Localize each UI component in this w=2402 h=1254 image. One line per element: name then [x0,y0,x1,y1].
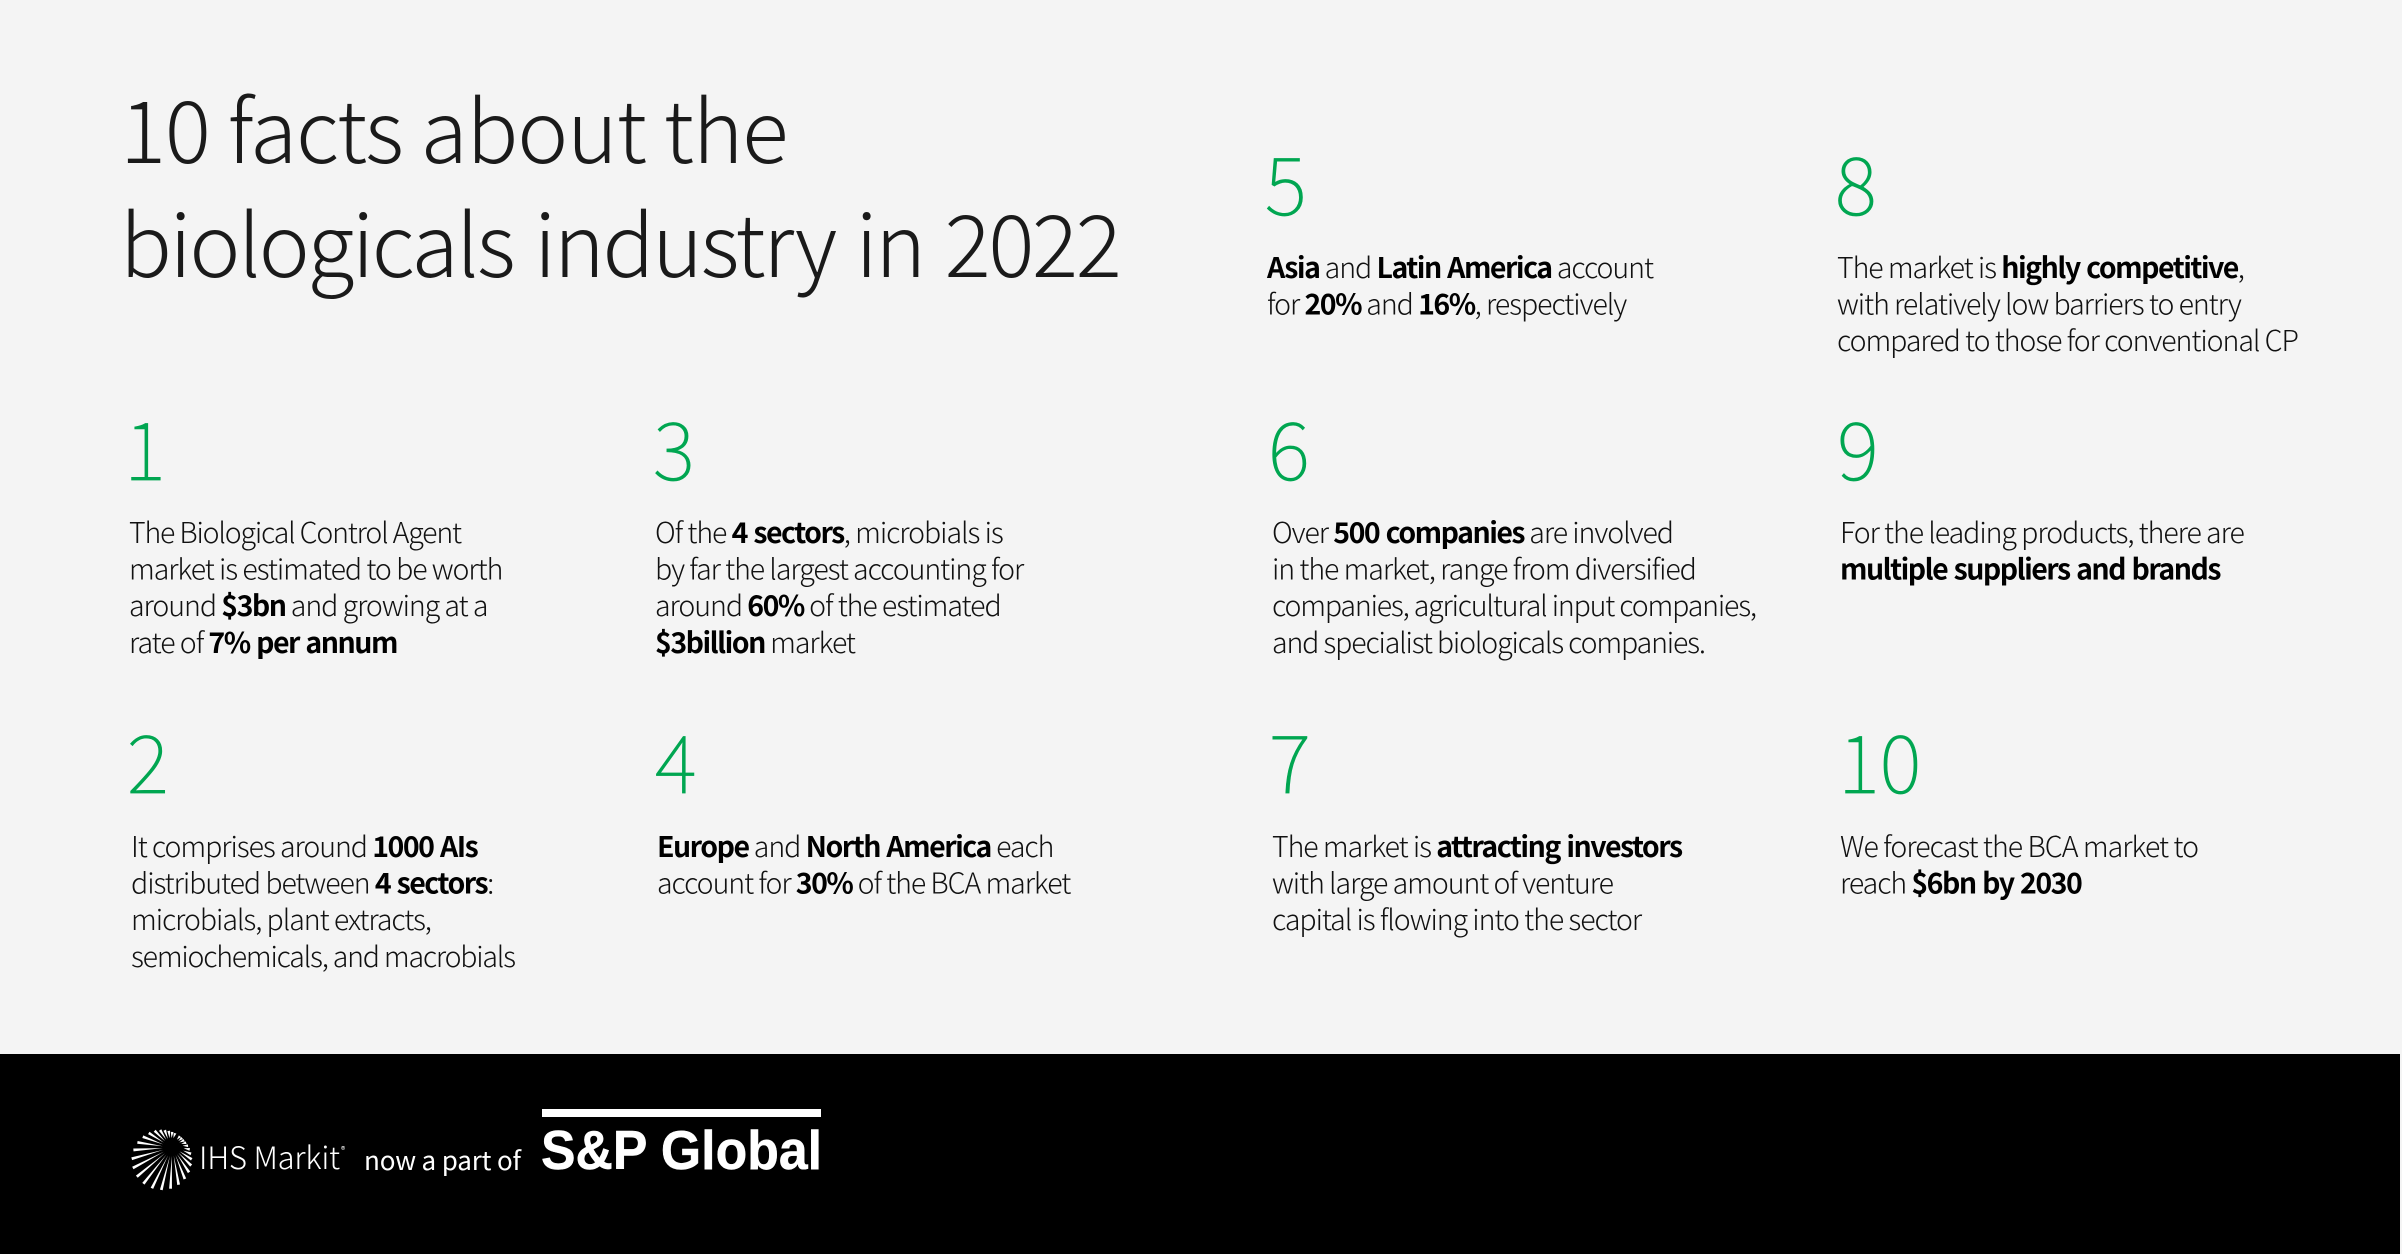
fact 7: with large amount of venture [1272,862,1614,903]
fact 7: capital is flowing into the sector [1272,898,1643,939]
fact 1: The Biological Control Agent [129,511,462,552]
fact 2: semiochemicals, and macrobials [131,935,515,976]
fact 2: microbials, plant extracts, [131,898,431,939]
fact 4: 4 [655,701,697,817]
fact 6: 6 [1268,388,1310,504]
fact 1: market is estimated to be worth [129,548,502,589]
fact 5: 5 [1265,123,1307,239]
registered mark: ® [341,1143,345,1156]
fact 5 [1265,123,1654,324]
fact 10: reach $6bn by 2030 [1840,862,2082,903]
fact 9: multiple suppliers and brands [1840,548,2221,589]
fact 6: in the market, range from diversified [1272,548,1696,589]
fact 10: 10 [1838,701,1921,817]
fact 8: compared to those for conventional CP [1837,319,2298,360]
fact 9: For the leading products, there are [1840,511,2244,552]
fact 3: Of the 4 sectors, microbials is [655,511,1003,552]
fact 3: by far the largest accounting for [655,548,1025,589]
fact 10: We forecast the BCA market to [1840,825,2198,866]
fact 9: 9 [1837,388,1879,504]
fact 3: $3billion market [655,621,856,662]
fact 10 [1838,701,2198,903]
footer band [0,1054,2400,1254]
fact 2: It comprises around 1000 AIs [131,825,479,866]
fact 2 [127,701,515,976]
title [120,63,1119,302]
fact 2: distributed between 4 sectors: [131,862,493,903]
IHS Markit wordmark: IHS Markit [199,1133,340,1178]
title: 10 facts about the [120,63,787,188]
fact 1: around $3bn and growing at a [129,584,487,625]
fact 7 [1269,701,1683,939]
now a part of: now a part of [364,1141,523,1178]
fact 4: Europe and North America each [657,825,1053,866]
fact 4 [655,701,1071,903]
fact 1: rate of 7% per annum [129,621,397,662]
fact 7: The market is attracting investors [1272,825,1683,866]
S&amp;P Global logo: S&P Global [541,1119,822,1181]
title: biologicals industry in 2022 [120,177,1119,302]
fact 3 [653,388,1025,662]
fact 2: 2 [127,701,169,817]
fact 7: 7 [1269,701,1311,817]
fact 6: and specialist biologicals companies. [1272,621,1705,662]
fact 8: The market is highly competitive, [1837,246,2244,287]
fact 1: 1 [124,388,166,504]
fact 8 [1835,123,2298,360]
fact 9 [1837,388,2244,589]
fact 1 [124,388,502,662]
fact 3: around 60% of the estimated [655,584,1001,625]
fact 8: 8 [1835,123,1877,239]
fact 6 [1268,388,1756,662]
fact 4: account for 30% of the BCA market [657,862,1071,903]
fact 6: companies, agricultural input companies, [1272,584,1756,625]
fact 8: with relatively low barriers to entry [1837,283,2242,324]
fact 5: for 20% and 16%, respectively [1267,283,1627,324]
fact 6: Over 500 companies are involved [1272,511,1673,552]
fact 5: Asia and Latin America account [1266,246,1654,287]
icon: IHS Markit starburst [131,1129,192,1190]
fact 3: 3 [653,388,695,504]
